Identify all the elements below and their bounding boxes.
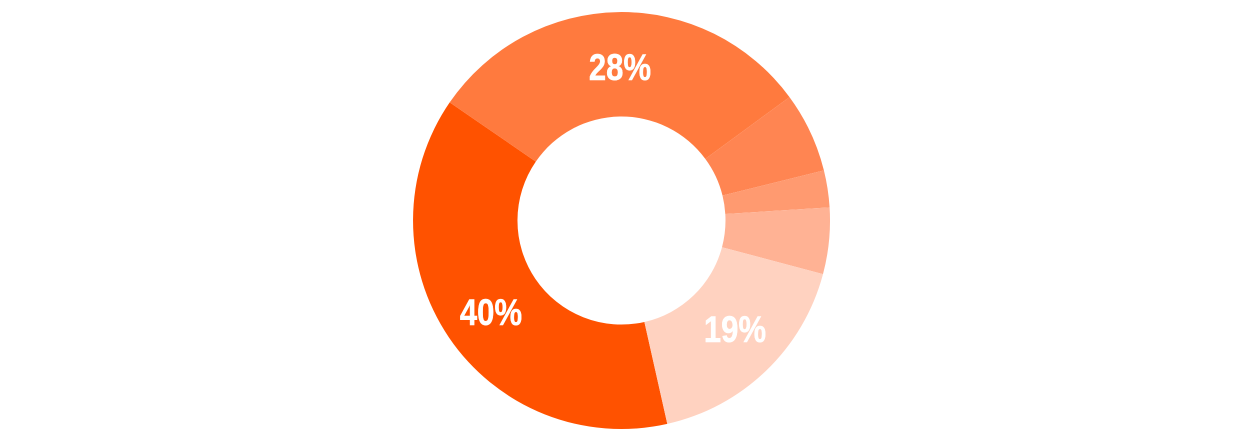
- segment: small 2: [722, 170, 830, 214]
- label: 28%: 28%: [589, 48, 651, 89]
- segment: 19%: [644, 247, 823, 424]
- segment: 40%: [413, 102, 667, 429]
- segment: small 3: [722, 207, 830, 274]
- segment: 28%: [450, 12, 790, 162]
- segment: small 1: [705, 97, 824, 196]
- label: 40%: 40%: [460, 293, 522, 334]
- label: 19%: 19%: [704, 310, 766, 351]
